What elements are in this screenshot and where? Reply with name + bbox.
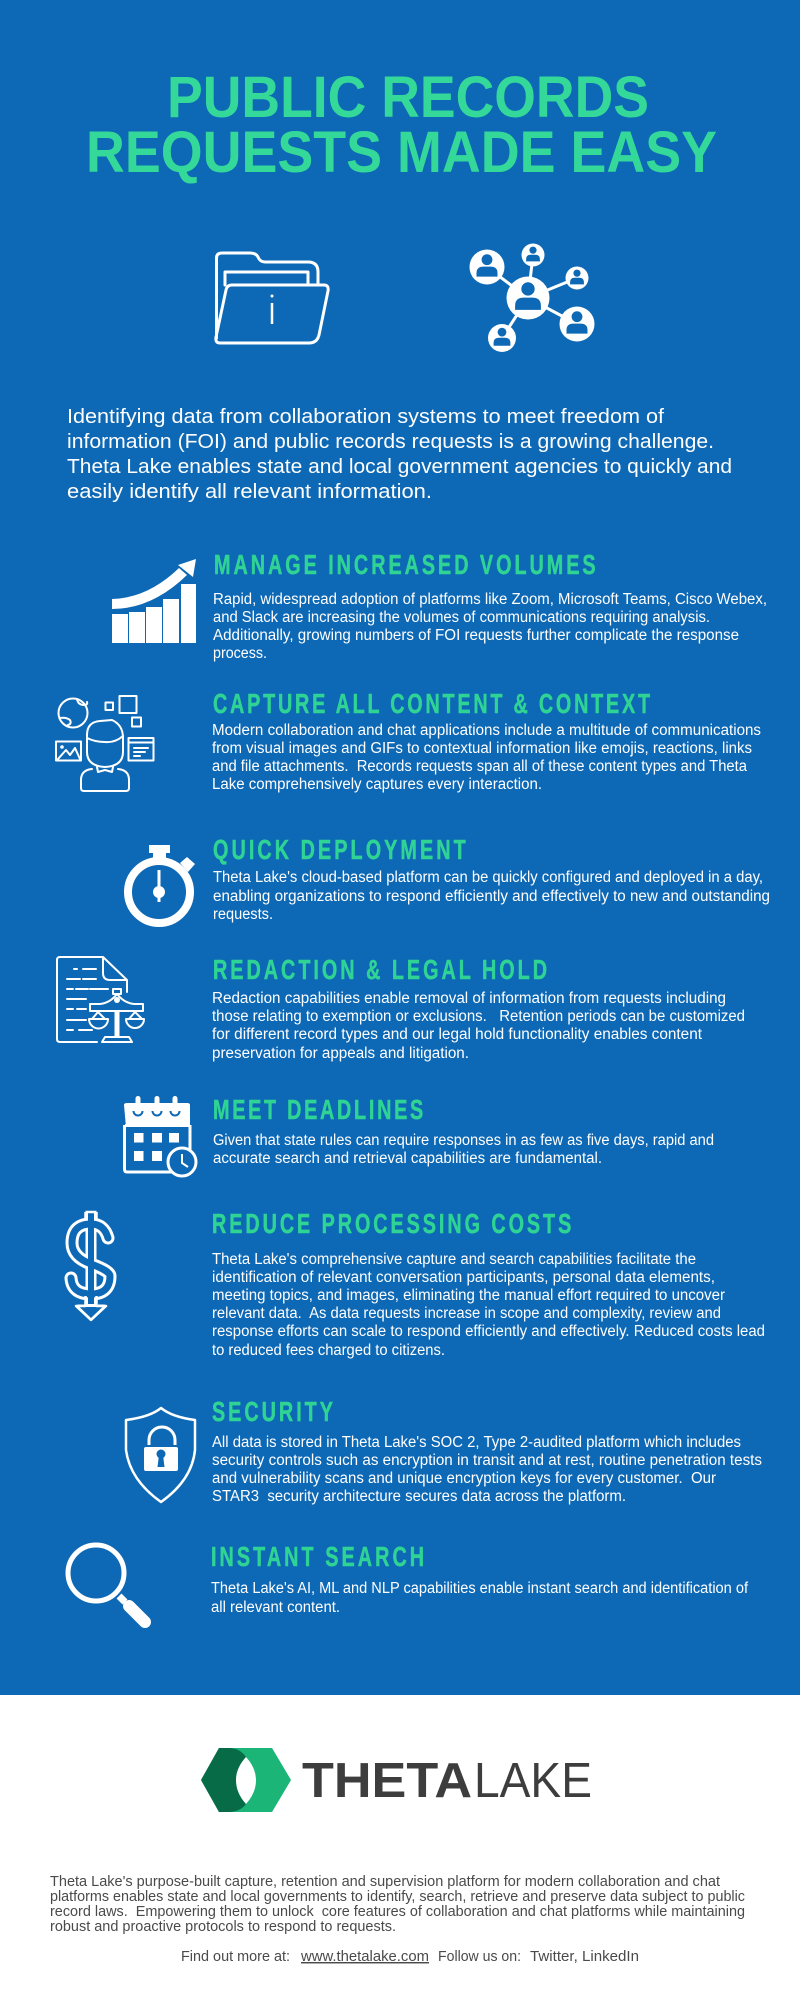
heading: MEET DEADLINES (213, 1095, 423, 1126)
panel: manage increased volumes (112, 550, 767, 662)
footer links: Follow us on: (438, 1949, 521, 1965)
body text (213, 869, 770, 923)
body text: requests. (213, 906, 273, 923)
logo wordmark: LAKE (474, 1754, 592, 1808)
body text (211, 1580, 749, 1616)
footer description: robust and proactive protocols to respond to requests. (50, 1919, 396, 1935)
heading: MANAGE INCREASED VOLUMES (214, 550, 596, 581)
body text: Rapid, widespread adoption of platforms like Zoom, Microsoft Teams, Cisco Webex, (213, 591, 767, 608)
panel: redaction and legal hold (57, 955, 745, 1062)
body text (212, 1434, 762, 1505)
icon: stopwatch (128, 845, 195, 923)
panel: instant search (68, 1542, 749, 1622)
footer description: platforms enables state and local governments to identify, search, retrieve and preserve data subject to public (50, 1889, 745, 1905)
title: REQUESTS MADE EASY (86, 120, 717, 185)
body text: All data is stored in Theta Lake's SOC 2, Type 2-audited platform which includes (212, 1434, 741, 1451)
body text: Given that state rules can require responses in as few as five days, rapid and (213, 1132, 714, 1149)
body text: Theta Lake's AI, ML and NLP capabilities enable instant search and identification of (211, 1580, 749, 1597)
body text (212, 990, 745, 1062)
icon: network of people (470, 244, 594, 352)
logo: Theta Lake (201, 1748, 592, 1812)
body text: meeting topics, and images, eliminating the manual effort required to uncover (212, 1287, 725, 1304)
panel: meet deadlines (124, 1095, 714, 1176)
intro text: easily identify all relevant information. (67, 481, 432, 503)
logo mark: hexagon (201, 1748, 291, 1812)
body text: all relevant content. (211, 1599, 340, 1616)
body text: Lake comprehensively captures every interaction. (212, 776, 542, 793)
icon: dollar sign with down arrow (71, 1212, 110, 1320)
intro text: Theta Lake enables state and local government agencies to quickly and (67, 456, 732, 478)
icon: calendar with clock (124, 1096, 196, 1176)
body text (213, 591, 767, 662)
body text: relevant data. As data requests increase in scope and complexity, review and (212, 1305, 721, 1322)
body text: and Slack are increasing the volumes of communications requiring analysis. (213, 609, 710, 626)
footer description (50, 1874, 745, 1935)
title: PUBLIC RECORDS (167, 65, 649, 130)
body text (213, 1132, 714, 1167)
body text: preservation for appeals and litigation. (212, 1045, 469, 1062)
heading: REDUCE PROCESSING COSTS (212, 1209, 571, 1240)
icon: folder (216, 253, 328, 343)
body text: Additionally, growing numbers of FOI requests further complicate the response (213, 627, 739, 644)
panel: capture all content and context (56, 689, 761, 793)
footer links: www.thetalake.com (300, 1949, 429, 1965)
body text: those relating to exemption or exclusions. Retention periods can be customized (212, 1008, 745, 1025)
body text: process. (213, 645, 267, 662)
heading: SECURITY (212, 1397, 333, 1428)
icon: person with content (56, 696, 154, 791)
body text: to reduced fees charged to citizens. (212, 1342, 445, 1359)
title (86, 65, 717, 185)
heading: QUICK DEPLOYMENT (213, 835, 466, 866)
body text: response efforts can scale to respond efficiently and effectively. Reduced costs lead (212, 1323, 765, 1340)
footer description: record laws. Empowering them to unlock core features of collaboration and chat platforms while maintaining (50, 1904, 745, 1920)
body text: and file attachments. Records requests span all of these content types and Theta (212, 758, 747, 775)
icon: shield with padlock (126, 1408, 195, 1502)
body text: enabling organizations to respond efficiently and effectively to new and outstanding (213, 888, 770, 905)
icon: rising bar chart (112, 559, 196, 643)
footer links: Find out more at: (181, 1949, 290, 1965)
intro text: information (FOI) and public records requests is a growing challenge. (67, 431, 714, 453)
body text: for different record types and our legal hold functionality enables content (212, 1026, 703, 1043)
panel: security (126, 1397, 762, 1505)
heading: CAPTURE ALL CONTENT & CONTEXT (213, 689, 650, 720)
body text: and vulnerability scans and unique encryption keys for every customer. Our (212, 1470, 716, 1487)
icon: magnifying glass (68, 1545, 145, 1622)
intro text: Identifying data from collaboration systems to meet freedom of (67, 406, 664, 428)
body text (212, 722, 761, 793)
footer links (181, 1949, 639, 1965)
body text: Theta Lake's cloud-based platform can be quickly configured and deployed in a day, (213, 869, 763, 886)
body text: Redaction capabilities enable removal of information from requests including (212, 990, 726, 1007)
footer description: Theta Lake's purpose-built capture, retention and supervision platform for modern collaboration and chat (50, 1874, 720, 1890)
logo wordmark (302, 1754, 592, 1808)
panel: quick deployment (128, 835, 770, 923)
body text: accurate search and retrieval capabilities are fundamental. (213, 1150, 602, 1167)
footer links: Twitter, LinkedIn (530, 1949, 639, 1965)
heading: REDACTION & LEGAL HOLD (213, 955, 547, 986)
body text (212, 1251, 765, 1359)
intro text (67, 406, 732, 503)
body text: from visual images and GIFs to contextual information like emojis, reactions, links (212, 740, 752, 757)
body text: identification of relevant conversation participants, personal data elements, (212, 1269, 715, 1286)
heading: INSTANT SEARCH (211, 1542, 424, 1573)
body text: STAR3 security architecture secures data across the platform. (212, 1488, 626, 1505)
logo wordmark: THETA (302, 1754, 472, 1808)
body text: Modern collaboration and chat applications include a multitude of communications (212, 722, 761, 739)
body text: Theta Lake's comprehensive capture and search capabilities facilitate the (212, 1251, 696, 1268)
panel: reduce processing costs (71, 1209, 765, 1359)
body text: security controls such as encryption in transit and at rest, routine penetration tests (212, 1452, 762, 1469)
icon: document with scales (57, 957, 144, 1042)
